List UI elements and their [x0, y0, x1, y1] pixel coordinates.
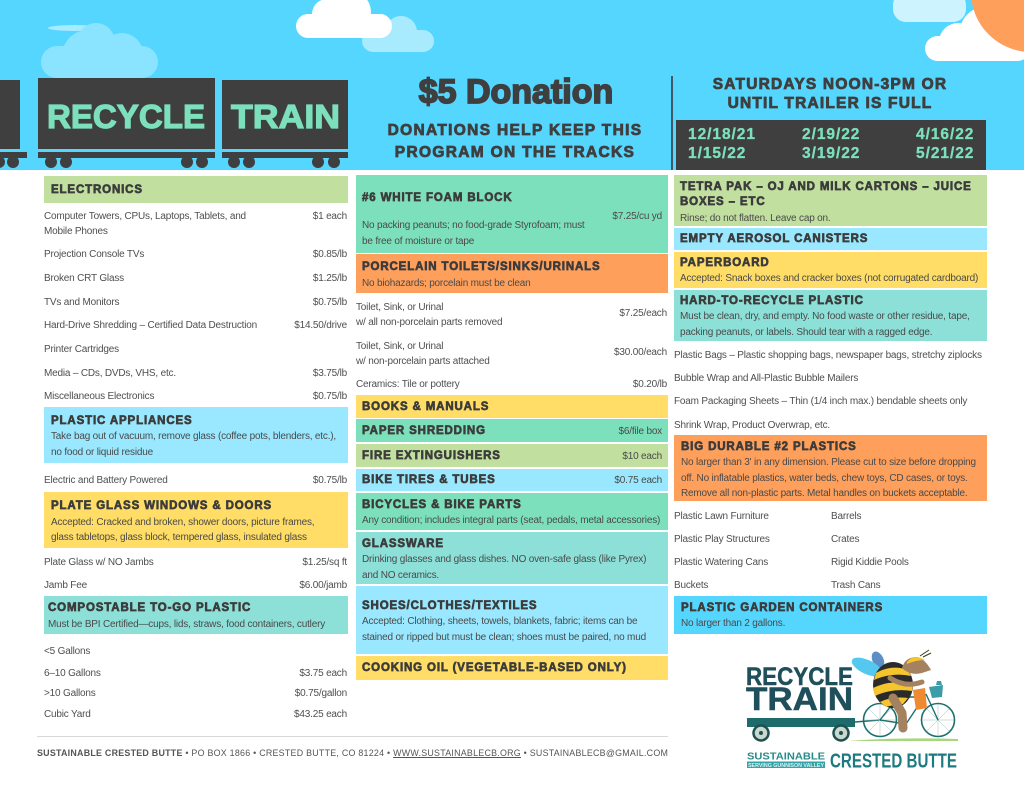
- logo wordmark: TRAIN: [746, 681, 853, 717]
- item: bubble wrap: Bubble Wrap and All-Plastic Bubble Mailers: [674, 373, 858, 384]
- donation subtext: [388, 122, 642, 161]
- row: toilet parts attached: w/ non-porcelain parts attached: [356, 356, 490, 367]
- panel: paper shredding: [356, 419, 668, 442]
- row: toilet parts removed: [356, 302, 667, 328]
- row: projection TVs: [44, 249, 347, 260]
- logo sustainable wordmark: SUSTAINABLE: [747, 752, 825, 762]
- panel: bicycles: [356, 493, 668, 530]
- row: computers: Mobile Phones: [44, 226, 108, 237]
- panel: cooking oil: [356, 656, 668, 680]
- row: toilet parts attached: $30.00/each: [614, 347, 667, 358]
- train wording on train: TRAIN: [231, 98, 340, 135]
- panel: hard-to-recycle plastic: HARD-TO-RECYCLE PLASTIC: [680, 294, 864, 306]
- item: plastic bags: Plastic Bags – Plastic shopping bags, newspaper bags, stretchy ziplocks: [674, 350, 982, 361]
- pale cloud left: [41, 23, 158, 82]
- row: 6-10 gallons: $3.75 each: [299, 668, 347, 679]
- panel: glassware: Drinking glasses and glass dishes. NO oven-safe glass (like Pyrex): [362, 554, 646, 565]
- row: projection TVs: $0.85/lb: [313, 249, 347, 260]
- row: toilet parts removed: $7.25/each: [619, 308, 667, 319]
- schedule heading: [712, 76, 947, 112]
- list: durable plastics second column: Trash Cans: [831, 580, 880, 591]
- row: electric and battery powered: Electric and Battery Powered: [44, 475, 168, 486]
- row: CRT glass: $1.25/lb: [313, 273, 347, 284]
- logo bear arm and leg: [890, 678, 922, 684]
- panel: hard-to-recycle plastic: [674, 290, 987, 341]
- panel: tetra pak: TETRA PAK – OJ AND MILK CARTONS – JUICE: [680, 181, 972, 193]
- row: media: Media – CDs, DVDs, VHS, etc.: [44, 368, 176, 379]
- panel: hard-to-recycle plastic: packing peanuts, or labels. Should tear with a ragged edge.: [680, 327, 932, 338]
- panel: big durable plastics: BIG DURABLE #2 PLASTICS: [681, 441, 857, 453]
- row: TVs and monitors: [44, 297, 347, 308]
- row: printer cartridges: Printer Cartridges: [44, 344, 119, 355]
- donation subtext: PROGRAM ON THE TRACKS: [395, 144, 635, 161]
- row: 6-10 gallons: [44, 668, 347, 679]
- header sky banner: [0, 0, 1024, 170]
- schedule heading: SATURDAYS NOON-3PM OR: [713, 76, 947, 93]
- panel: tetra pak: [674, 175, 987, 226]
- row: cubic yard: [44, 709, 347, 720]
- panel: compostable to-go plastic: [44, 596, 348, 634]
- panel: plastic garden containers: [674, 596, 987, 634]
- logo basket: [929, 685, 943, 698]
- footer divider: [37, 736, 668, 737]
- list: durable plastics second column: [831, 511, 909, 591]
- panel: paper shredding: PAPER SHREDDING: [362, 425, 486, 437]
- list: durable plastics first column: [674, 511, 770, 591]
- row: computers: Computer Towers, CPUs, Laptops, Tablets, and: [44, 211, 246, 222]
- donation heading: $5 Donation: [419, 73, 613, 111]
- sun: [971, 0, 1024, 52]
- row: plate glass price: [44, 557, 348, 568]
- panel: fire extinguishers: FIRE EXTINGUISHERS: [362, 450, 501, 462]
- panel: cooking oil: COOKING OIL (VEGETABLE-BASED ONLY): [362, 662, 627, 674]
- panel: compostable to-go plastic: COMPOSTABLE TO-GO PLASTIC: [48, 602, 251, 614]
- panel: plastic garden containers: No larger than 2 gallons.: [681, 618, 785, 629]
- row: electric and battery powered: [44, 475, 347, 486]
- date column 3: 5/21/22: [916, 145, 974, 162]
- panel: electronics: [44, 176, 348, 203]
- row: CRT glass: [44, 273, 347, 284]
- row: toilet parts attached: Toilet, Sink, or Urinal: [356, 341, 443, 352]
- panel: big durable plastics: Remove all non-plastic parts. Metal handles on buckets acceptable.: [681, 488, 968, 499]
- list: durable plastics second column: Crates: [831, 534, 859, 545]
- logo bicycle: [864, 694, 954, 736]
- date column 2: 2/19/22: [802, 126, 860, 143]
- logo delivery bag: [913, 688, 927, 710]
- panel: plastic appliances: [44, 407, 348, 463]
- header vertical divider: [671, 76, 672, 170]
- panel: aerosol: EMPTY AEROSOL CANISTERS: [680, 233, 868, 245]
- row: ceramics: $0.20/lb: [633, 379, 667, 390]
- row: plate glass price: Plate Glass w/ NO Jambs: [44, 557, 154, 568]
- row: miscellaneous electronics: Miscellaneous Electronics: [44, 391, 154, 402]
- train car train: [222, 80, 348, 168]
- panel: paperboard: Accepted: Snack boxes and cracker boxes (not corrugated cardboard): [680, 273, 978, 284]
- panel: plate glass: Accepted: Cracked and broken, shower doors, picture frames,: [51, 517, 314, 528]
- panel: shoes clothes textiles: [356, 586, 668, 654]
- panel: bike tires: BIKE TIRES & TUBES: [362, 474, 496, 486]
- panel: paperboard: [674, 252, 987, 288]
- panel: glassware: GLASSWARE: [362, 538, 444, 550]
- panel: hard-to-recycle plastic: Must be clean, dry, and empty. No food waste or other residue, tape,: [680, 311, 970, 322]
- pale cloud centre: [362, 16, 434, 52]
- row: over 10 gallons: $0.75/gallon: [295, 688, 347, 699]
- panel: electronics: ELECTRONICS: [51, 184, 143, 196]
- list: durable plastics second column: Rigid Kiddie Pools: [831, 557, 909, 568]
- panel: white foam block: be free of moisture or tape: [362, 236, 474, 247]
- panel: plastic appliances: no food or liquid residue: [51, 447, 153, 458]
- panel: books and manuals: BOOKS & MANUALS: [362, 401, 489, 413]
- train car left partial: [0, 80, 27, 168]
- panel: shoes clothes textiles: stained or ripped but must be clean; shoes must be paired, no mud: [362, 632, 646, 643]
- row: computers: [44, 211, 347, 237]
- logo trailer: [747, 718, 880, 740]
- panel: plastic garden containers: PLASTIC GARDEN CONTAINERS: [681, 602, 883, 614]
- panel: paper shredding: $6/file box: [618, 426, 662, 437]
- panel: white foam block: #6 WHITE FOAM BLOCK: [362, 192, 513, 204]
- recycle wording on train: RECYCLE: [47, 98, 205, 135]
- logo wordmark: RECYCLE: [746, 663, 853, 691]
- row: TVs and monitors: TVs and Monitors: [44, 297, 119, 308]
- panel: big durable plastics: off. No inflatable plastics, water beds, chew toys, CD cases, or toys.: [681, 473, 968, 484]
- item: foam packaging: Foam Packaging Sheets – Thin (1/4 inch max.) bendable sheets only: [674, 396, 967, 407]
- donation subtext: DONATIONS HELP KEEP THIS: [388, 122, 642, 139]
- list: durable plastics first column: Buckets: [674, 580, 708, 591]
- row: hard-drive shredding: Hard-Drive Shredding – Certified Data Destruction: [44, 320, 257, 331]
- panel: books and manuals: [356, 395, 668, 418]
- panel: white foam block: $7.25/cu yd: [612, 211, 662, 222]
- train car recycle: [38, 78, 215, 168]
- panel: big durable plastics: [674, 435, 987, 501]
- white cloud centre: [296, 0, 392, 38]
- row: toilet parts removed: Toilet, Sink, or Urinal: [356, 302, 443, 313]
- panel: shoes clothes textiles: SHOES/CLOTHES/TEXTILES: [362, 600, 537, 612]
- row: media: $3.75/lb: [313, 368, 347, 379]
- row: cubic yard: $43.25 each: [294, 709, 347, 720]
- row: jamb fee: [44, 580, 347, 591]
- white cloud top right: [925, 7, 1024, 61]
- panel: white foam block: No packing peanuts; no food-grade Styrofoam; must: [362, 220, 584, 231]
- date column 2: 3/19/22: [802, 145, 860, 162]
- panel: bicycles: BICYCLES & BIKE PARTS: [362, 499, 522, 511]
- logo bee head: [902, 657, 931, 674]
- panel: plate glass: [44, 492, 348, 548]
- row: ceramics: [356, 379, 667, 390]
- panel: porcelain: PORCELAIN TOILETS/SINKS/URINALS: [362, 261, 601, 273]
- date column 1: [688, 126, 756, 162]
- list: durable plastics first column: Plastic Play Structures: [674, 534, 770, 545]
- logo wordmark: [746, 663, 853, 717]
- panel: glassware: and NO ceramics.: [362, 570, 439, 581]
- row: miscellaneous electronics: [44, 391, 347, 402]
- list: durable plastics first column: Plastic Lawn Furniture: [674, 511, 769, 522]
- panel: aerosol: [674, 228, 987, 250]
- panel: plate glass: glass tabletops, glass block, tempered glass, insulated glass: [51, 532, 307, 543]
- row: plate glass price: $1.25/sq ft: [302, 557, 347, 568]
- panel: tetra pak: BOXES – ETC: [680, 196, 766, 208]
- pale cloud top right: [893, 0, 966, 22]
- row: ceramics: Ceramics: Tile or pottery: [356, 379, 460, 390]
- row: jamb fee: Jamb Fee: [44, 580, 87, 591]
- footer contact line: SUSTAINABLE CRESTED BUTTE • PO BOX 1866 • CRESTED BUTTE, CO 81224 • WWW.SUSTAINABLECB.ORG • SUSTAINABLECB@GMAIL.COM: [37, 748, 668, 758]
- schedule heading: UNTIL TRAILER IS FULL: [728, 94, 932, 112]
- row: CRT glass: Broken CRT Glass: [44, 273, 124, 284]
- row: hard-drive shredding: $14.50/drive: [294, 320, 347, 331]
- date column 1: 1/15/22: [688, 145, 746, 162]
- row: electric and battery powered: $0.75/lb: [313, 475, 347, 486]
- panel: plate glass: PLATE GLASS WINDOWS & DOORS: [51, 500, 272, 512]
- row: under 5 gallons: <5 Gallons: [44, 646, 90, 657]
- row: miscellaneous electronics: $0.75/lb: [313, 391, 347, 402]
- row: cubic yard: Cubic Yard: [44, 709, 91, 720]
- row: over 10 gallons: [44, 688, 347, 699]
- row: media: [44, 368, 347, 379]
- panel: compostable to-go plastic: Must be BPI Certified—cups, lids, straws, food containers, cutlery: [48, 619, 325, 630]
- list: durable plastics second column: Barrels: [831, 511, 861, 522]
- panel: tetra pak: Rinse; do not flatten. Leave cap on.: [680, 213, 830, 224]
- panel: white foam block: [356, 175, 668, 253]
- panel: plastic appliances: PLASTIC APPLIANCES: [51, 415, 193, 427]
- panel: bike tires: [356, 469, 668, 491]
- list: durable plastics first column: Plastic Watering Cans: [674, 557, 768, 568]
- row: jamb fee: $6.00/jamb: [299, 580, 347, 591]
- panel: fire extinguishers: $10 each: [622, 451, 662, 462]
- item: shrink wrap: Shrink Wrap, Product Overwrap, etc.: [674, 420, 830, 431]
- logo ground: [848, 738, 958, 741]
- logo bee wings: [849, 650, 887, 680]
- header illustration: clouds, sun and train: [0, 0, 1024, 168]
- row: TVs and monitors: $0.75/lb: [313, 297, 347, 308]
- dates panel: [676, 120, 986, 170]
- date column 2: [802, 126, 860, 162]
- row: computers: $1 each: [313, 211, 347, 222]
- panel: plastic appliances: Take bag out of vacuum, remove glass (coffee pots, blenders, etc.),: [51, 431, 336, 442]
- panel: bicycles: Any condition; includes integral parts (seat, pedals, metal accessories): [362, 515, 660, 526]
- panel: bike tires: $0.75 each: [614, 475, 662, 486]
- panel: paperboard: PAPERBOARD: [680, 257, 770, 269]
- row: projection TVs: Projection Console TVs: [44, 249, 144, 260]
- panel: porcelain: [356, 254, 668, 293]
- panel: big durable plastics: No larger than 3' in any dimension. Please cut to size before dropping: [681, 457, 976, 468]
- row: toilet parts removed: w/ all non-porcelain parts removed: [356, 317, 502, 328]
- logo serving tagline: SERVING GUNNISON VALLEY: [748, 763, 824, 769]
- panel: shoes clothes textiles: Accepted: Clothing, sheets, towels, blankets, fabric; items can be: [362, 616, 637, 627]
- panel: fire extinguishers: [356, 444, 668, 467]
- row: over 10 gallons: >10 Gallons: [44, 688, 96, 699]
- date column 3: 4/16/22: [916, 126, 974, 143]
- logo: recycle train with bee on bicycle: [746, 650, 958, 772]
- panel: glassware: [356, 532, 668, 584]
- row: 6-10 gallons: 6–10 Gallons: [44, 668, 101, 679]
- date column 1: 12/18/21: [688, 126, 756, 143]
- row: toilet parts attached: [356, 341, 667, 367]
- logo bee body: [873, 662, 913, 708]
- date column 3: [916, 126, 974, 162]
- panel: porcelain: No biohazards; porcelain must be clean: [362, 278, 530, 289]
